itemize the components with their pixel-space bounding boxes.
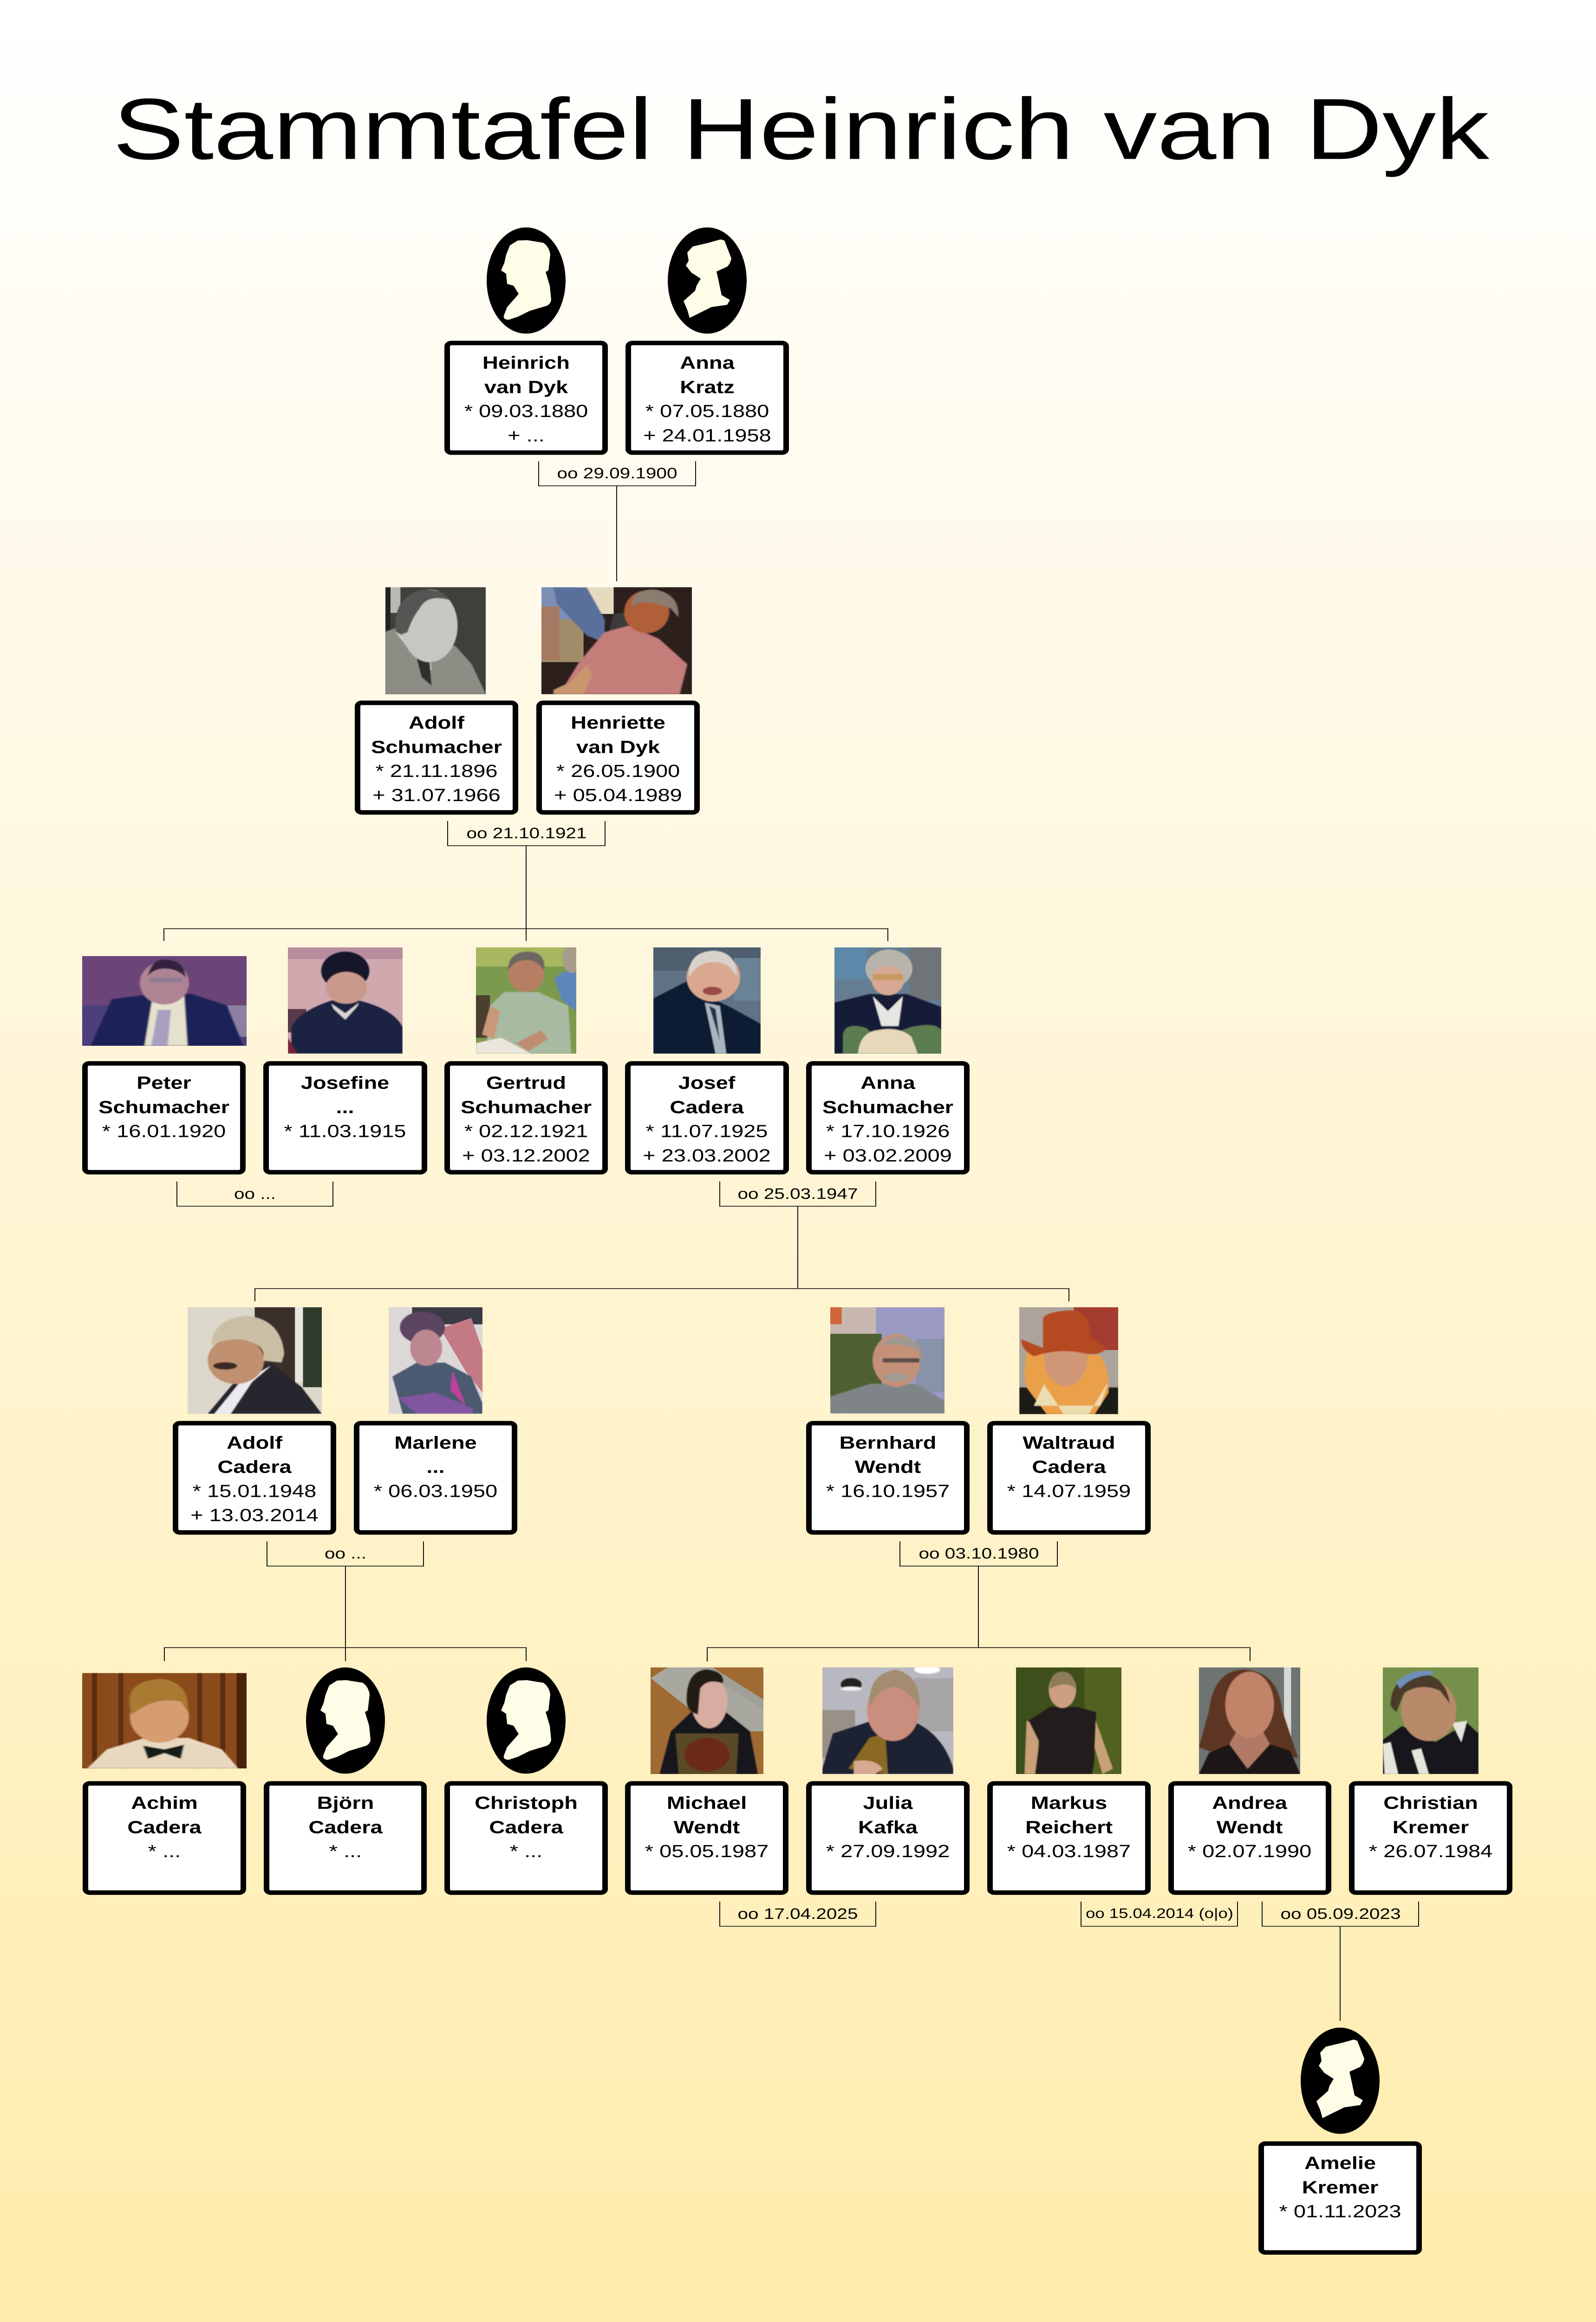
person: Christian Kremer: Kremer [1393, 1818, 1469, 1837]
person: Josefine: * 11.03.1915 [284, 1122, 406, 1141]
title: Stammtafel Heinrich van Dyk [113, 80, 1490, 177]
photo [651, 1668, 763, 1774]
person: Julia Kafka: Kafka [858, 1818, 918, 1837]
photo [1199, 1668, 1300, 1774]
person: Henriette van Dyk: * 26.05.1900 [556, 761, 680, 781]
person: Heinrich van Dyk [447, 228, 605, 453]
person: Markus Reichert [990, 1668, 1148, 1892]
person: Anna Schumacher: Schumacher [822, 1097, 953, 1117]
connector: Michael and Julia marriage: oo 17.04.2025 [738, 1905, 858, 1922]
icon: male silhouette [487, 1668, 566, 1774]
person: Heinrich van Dyk: + ... [508, 426, 545, 445]
person: Adolf Cadera: * 15.01.1948 [193, 1481, 316, 1501]
connector: Adolf and Henriette to children [164, 821, 888, 941]
person: Anna Kratz: + 24.01.1958 [643, 426, 771, 445]
photo [389, 1307, 482, 1414]
photo [1019, 1307, 1118, 1414]
connector: Andrea and Christian to Amelie: oo 05.09.2023 [1281, 1905, 1401, 1922]
person: Waltraud Cadera: * 14.07.1959 [1007, 1481, 1131, 1501]
connector: Markus and Andrea marriage: oo 15.04.2014 (o|o) [1086, 1906, 1233, 1921]
person: Michael Wendt: * 05.05.1987 [645, 1841, 769, 1861]
connector: Peter and Josefine marriage [177, 1181, 333, 1206]
person: Adolf Schumacher: * 21.11.1896 [376, 761, 497, 781]
person: Markus Reichert: Markus [1031, 1793, 1107, 1813]
photo [541, 587, 692, 694]
person: Waltraud Cadera: Waltraud [1023, 1433, 1115, 1453]
person: Christian Kremer: * 26.07.1984 [1369, 1841, 1492, 1861]
photo [830, 1307, 945, 1414]
person: Josef Cadera [628, 947, 786, 1172]
photo [834, 947, 941, 1054]
person: Adolf Schumacher [358, 587, 515, 812]
connector: Josef and Anna to children [255, 1181, 1069, 1301]
person: Henriette van Dyk: + 05.04.1989 [554, 785, 682, 805]
person: Marlene [357, 1307, 515, 1533]
person: Adolf Cadera: Cadera [217, 1457, 292, 1477]
person: Markus Reichert: * 04.03.1987 [1007, 1841, 1131, 1861]
person: Bernhard Wendt [809, 1307, 967, 1533]
person: Julia Kafka: Julia [863, 1793, 913, 1813]
person: Julia Kafka: * 27.09.1992 [826, 1841, 950, 1861]
connector: Heinrich and Anna to Henriette [539, 461, 696, 581]
photo [1383, 1668, 1479, 1774]
person: Amelie Kremer [1261, 2028, 1419, 2252]
icon: male silhouette [487, 228, 566, 333]
person: Christoph Cadera: * ... [510, 1841, 542, 1861]
person: Achim Cadera: Achim [131, 1793, 198, 1813]
photo [288, 947, 403, 1054]
person: Adolf Cadera: Adolf [227, 1433, 283, 1453]
person: Anna Kratz: Kratz [680, 378, 735, 397]
person: Peter Schumacher: * 16.01.1920 [102, 1122, 226, 1141]
person: Gertrud Schumacher [447, 943, 605, 1172]
person: Gertrud Schumacher: Schumacher [461, 1097, 592, 1117]
person: Marlene: Marlene [394, 1433, 477, 1453]
person: Anna Kratz [628, 228, 786, 453]
person: Josef Cadera: Cadera [670, 1097, 744, 1117]
connector: Bernhard and Waltraud to children: oo 03.10.1980 [919, 1545, 1039, 1562]
person: Amelie Kremer: Kremer [1302, 2178, 1378, 2198]
photo [385, 587, 486, 694]
person: Andrea Wendt: Wendt [1217, 1818, 1283, 1837]
person: Christian Kremer [1352, 1668, 1510, 1892]
person: Björn Cadera: Cadera [308, 1818, 383, 1837]
person: Michael Wendt [628, 1668, 786, 1892]
person: Marlene: * 06.03.1950 [374, 1481, 497, 1501]
person: Peter Schumacher: Peter [137, 1073, 191, 1093]
connector: Michael and Julia marriage [720, 1902, 876, 1926]
person: Gertrud Schumacher: + 03.12.2002 [462, 1146, 590, 1166]
person: Achim Cadera [82, 1673, 247, 1892]
photo [82, 1673, 247, 1768]
person: Heinrich van Dyk: Heinrich [482, 353, 570, 373]
person: Peter Schumacher [82, 956, 247, 1172]
person: Bernhard Wendt: Bernhard [840, 1433, 936, 1453]
person: Björn Cadera: * ... [329, 1841, 362, 1861]
connector: Bernhard and Waltraud to children [707, 1541, 1250, 1662]
person: Christoph Cadera: Cadera [489, 1818, 563, 1837]
person: Henriette van Dyk [539, 587, 697, 812]
person: Josefine [266, 947, 424, 1172]
person: Josefine: ... [336, 1097, 354, 1117]
person: Andrea Wendt: Andrea [1212, 1793, 1287, 1813]
photo [1016, 1668, 1121, 1774]
person: Anna Schumacher: + 03.02.2009 [824, 1146, 952, 1166]
photo [822, 1665, 953, 1774]
person: Henriette van Dyk: van Dyk [576, 737, 660, 757]
connector: Adolf and Marlene to children [164, 1541, 526, 1661]
person: Waltraud Cadera [990, 1307, 1148, 1533]
person: Michael Wendt: Wendt [674, 1818, 740, 1837]
person: Björn Cadera: Björn [317, 1793, 374, 1813]
photo [653, 947, 761, 1054]
person: Josef Cadera: + 23.03.2002 [643, 1146, 771, 1166]
person: Peter Schumacher: Schumacher [98, 1097, 229, 1117]
person: Heinrich van Dyk: van Dyk [484, 378, 568, 397]
person: Anna Schumacher [809, 947, 967, 1172]
person: Waltraud Cadera: Cadera [1032, 1457, 1106, 1477]
photo [476, 943, 582, 1054]
person: Henriette van Dyk: Henriette [571, 713, 665, 733]
person: Marlene: ... [426, 1457, 445, 1477]
person: Björn Cadera [267, 1668, 424, 1892]
person: Christoph Cadera [447, 1668, 605, 1892]
person: Anna Kratz: Anna [680, 353, 735, 373]
person: Andrea Wendt [1171, 1668, 1329, 1892]
person: Josef Cadera: Josef [678, 1073, 736, 1093]
connector: Markus and Andrea marriage [1081, 1902, 1238, 1926]
person: Christian Kremer: Christian [1383, 1793, 1478, 1813]
person: Bernhard Wendt: Wendt [855, 1457, 921, 1477]
person: Gertrud Schumacher: * 02.12.1921 [464, 1122, 588, 1141]
person: Heinrich van Dyk: * 09.03.1880 [464, 401, 588, 421]
photo [82, 956, 247, 1046]
connector: Andrea and Christian to Amelie [1262, 1902, 1419, 2021]
connector: Peter and Josefine marriage: oo ... [234, 1185, 276, 1202]
person: Anna Kratz: * 07.05.1880 [645, 401, 769, 421]
icon: female silhouette [668, 228, 747, 333]
person: Adolf Cadera: + 13.03.2014 [190, 1506, 319, 1525]
connector: Adolf and Henriette to children: oo 21.10.1921 [467, 825, 586, 841]
person: Adolf Schumacher: Adolf [409, 713, 465, 733]
person: Adolf Schumacher: Schumacher [371, 737, 502, 757]
connector: Josef and Anna to children: oo 25.03.1947 [738, 1185, 858, 1202]
person: Markus Reichert: Reichert [1025, 1818, 1113, 1837]
person: Achim Cadera: * ... [148, 1841, 181, 1861]
person: Achim Cadera: Cadera [127, 1818, 202, 1837]
person: Adolf Cadera [176, 1307, 333, 1533]
icon: female silhouette [1301, 2028, 1380, 2134]
person: Josefine: Josefine [301, 1073, 389, 1093]
person: Amelie Kremer: * 01.11.2023 [1279, 2202, 1401, 2221]
person: Anna Schumacher: * 17.10.1926 [826, 1122, 950, 1141]
person: Andrea Wendt: * 02.07.1990 [1188, 1841, 1311, 1861]
person: Christoph Cadera: Christoph [475, 1793, 578, 1813]
person: Michael Wendt: Michael [667, 1793, 747, 1813]
person: Adolf Schumacher: + 31.07.1966 [372, 785, 501, 805]
person: Bernhard Wendt: * 16.10.1957 [826, 1481, 950, 1501]
person: Anna Schumacher: Anna [860, 1073, 915, 1093]
person: Amelie Kremer: Amelie [1304, 2153, 1376, 2173]
icon: male silhouette [306, 1668, 385, 1774]
connector: Adolf and Marlene to children: oo ... [325, 1545, 366, 1562]
connector: Heinrich and Anna to Henriette: oo 29.09.1900 [557, 465, 677, 482]
person: Julia Kafka [809, 1665, 967, 1892]
person: Gertrud Schumacher: Gertrud [486, 1073, 566, 1093]
photo [188, 1307, 322, 1414]
person: Josef Cadera: * 11.07.1925 [646, 1122, 768, 1141]
